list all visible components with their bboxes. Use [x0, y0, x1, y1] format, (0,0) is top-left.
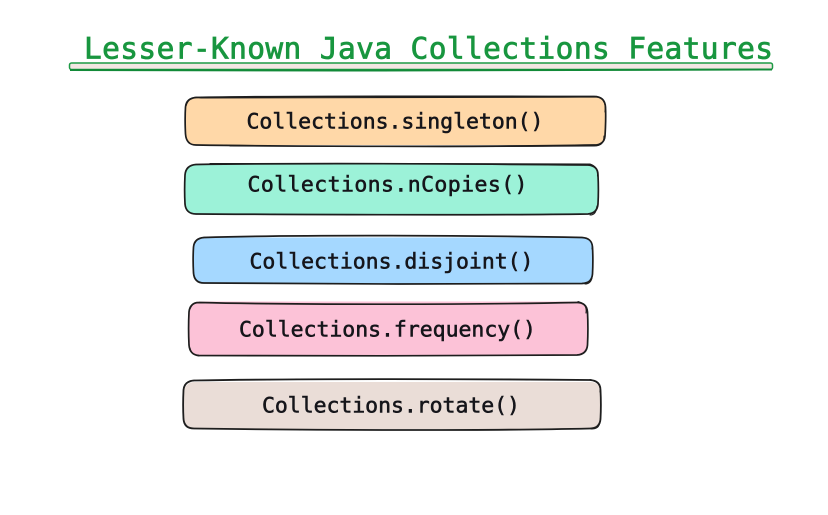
label: Collections.frequency() — [239, 318, 536, 342]
box: Collections.disjoint() — [193, 236, 593, 284]
label: Collections.disjoint() — [250, 250, 534, 274]
label: Collections.nCopies() — [248, 172, 528, 198]
box: Collections.rotate() — [183, 379, 601, 430]
box: Collections.nCopies() — [185, 163, 598, 215]
box: Collections.singleton() — [185, 96, 606, 147]
title underline — [70, 63, 772, 71]
label: Collections.rotate() — [262, 394, 520, 418]
title: Lesser-Known Java Collections Features — [84, 32, 773, 66]
box: Collections.frequency() — [189, 302, 588, 356]
label: Collections.singleton() — [246, 110, 544, 134]
